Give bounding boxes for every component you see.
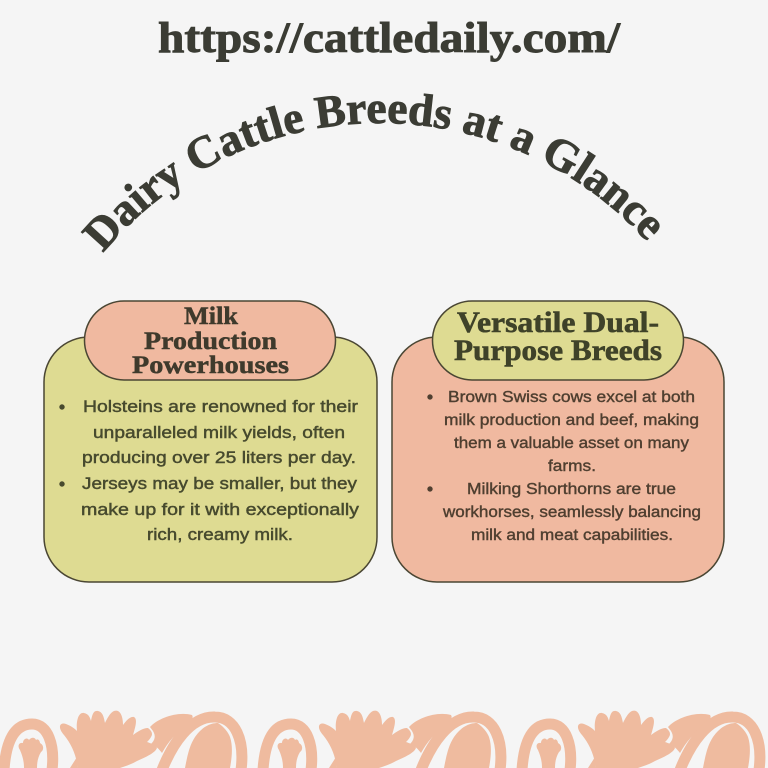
motif 3 [522, 711, 760, 768]
bullet list: left panel [60, 398, 360, 544]
heading: milk production powerhouses: Powerhouses [132, 352, 289, 379]
heading: versatile dual-purpose breeds: Purpose Breeds [454, 334, 662, 367]
panel background: right [392, 337, 724, 582]
heading pill: left [84, 301, 336, 380]
bullet list: left panel: Jerseys may be smaller, but they [82, 475, 358, 493]
website url heading: https://cattledaily.com/ [158, 15, 621, 62]
bullet list: left panel: make up for it with exceptionally [81, 501, 360, 519]
bullet list: right panel [428, 389, 701, 544]
motif 2 [263, 711, 501, 768]
motif 1 [4, 711, 242, 768]
decorative floral border [4, 711, 760, 768]
heading: milk production powerhouses: Milk [184, 303, 238, 330]
bullet list: right panel: workhorses, seamlessly balancing [442, 504, 701, 521]
bullet list: left panel: Holsteins are renowned for their [83, 398, 359, 416]
heading: versatile dual-purpose breeds: Versatile Dual- [457, 306, 659, 339]
bullet list: right panel: them a valuable asset on many [454, 435, 689, 452]
heading pill: right [432, 301, 684, 380]
heading: milk production powerhouses [132, 303, 289, 379]
bullet list: right panel: farms. [548, 458, 596, 475]
panel background: left [44, 337, 377, 582]
bullet list: right panel: Milking Shorthorns are true [467, 481, 676, 498]
heading: milk production powerhouses: Production [144, 328, 277, 355]
curved title: Dairy Cattle Breeds at a Glance [80, 93, 660, 253]
bullet list: left panel: rich, creamy milk. [147, 526, 293, 544]
bullet list: left panel: unparalleled milk yields, often [93, 424, 345, 442]
panel: milk production powerhouses [44, 301, 377, 582]
bullet list: left panel: producing over 25 liters per day. [82, 449, 356, 467]
bullet list: right panel: Brown Swiss cows excel at both [448, 389, 695, 406]
bullet list: right panel: milk production and beef, making [444, 412, 699, 429]
panel: versatile dual-purpose breeds [392, 301, 724, 582]
heading: versatile dual-purpose breeds [454, 306, 662, 367]
bullet list: right panel: milk and meat capabilities. [471, 527, 673, 544]
